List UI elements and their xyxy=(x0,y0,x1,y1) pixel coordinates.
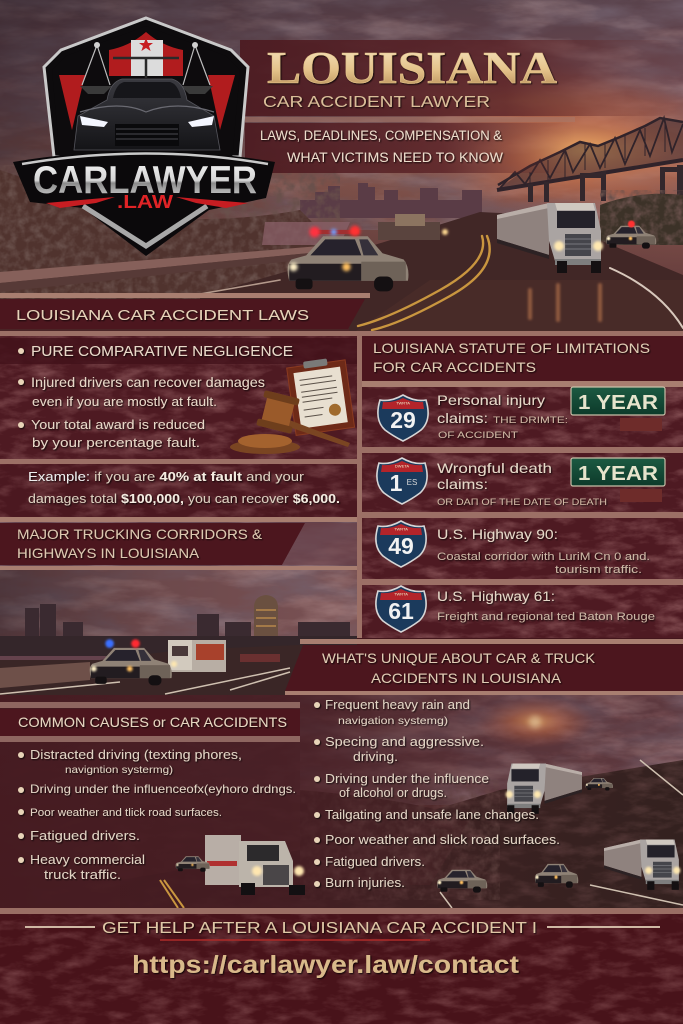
ambulance xyxy=(205,835,305,895)
section header: common causes: COMMON CAUSES or CAR ACCIDENTS xyxy=(18,714,287,730)
list: causes, right column: Poor weather and slick road surfaces. xyxy=(325,833,560,847)
list: causes, right column: Fatigued drivers. xyxy=(325,855,425,869)
tagline: LAWS, DEADLINES, COMPENSATION & xyxy=(260,128,502,143)
row: personal injury: Personal injury xyxy=(437,392,545,408)
row: highway 61: 61 xyxy=(388,598,414,624)
list: causes, right column: navigation systemg) xyxy=(338,715,448,727)
row: personal injury: THE DRIMTE: xyxy=(493,415,568,425)
scene: Baton Rouge skyline with police car xyxy=(0,517,357,695)
logo banner xyxy=(13,151,275,256)
icon: gavel xyxy=(230,390,350,454)
section header: what's unique xyxy=(285,639,683,695)
row: wrongful death: 1 xyxy=(390,470,403,496)
row: highway 61: U.S. Highway 61: xyxy=(437,589,555,604)
section header: Louisiana car accident laws xyxy=(0,293,683,336)
list: causes, right column: Frequent heavy rain and xyxy=(325,698,470,712)
bullet: award reduced: by your percentage fault. xyxy=(32,435,200,450)
row: wrongful death: ES xyxy=(407,478,417,487)
row: personal injury: OF ACCIDENT xyxy=(438,430,519,440)
icon: car front xyxy=(74,79,220,150)
road xyxy=(200,212,683,335)
panel: example calculation: damages total $100,000, you can recover $6,000. xyxy=(28,492,340,506)
subheading: CAR ACCIDENT LAWYER xyxy=(263,94,490,111)
column divider xyxy=(357,336,362,638)
list: causes, right column: driving. xyxy=(353,750,398,764)
section header: major trucking corridors: MAJOR TRUCKING CORRIDORS & xyxy=(17,526,263,542)
hero scene: highway, bridge and police car at sunset xyxy=(0,0,683,335)
bridge xyxy=(497,118,683,190)
distant traffic xyxy=(378,214,448,240)
list: causes, right column xyxy=(314,698,560,890)
bullet: award reduced: Your total award is reduced xyxy=(31,418,205,432)
list: causes, right column: Burn injuries. xyxy=(325,876,405,890)
sign: 1 year: 1 YEAR xyxy=(578,463,659,485)
panel: example calculation xyxy=(0,459,357,517)
list: causes, left column: Driving under the influenceofx(eyhoro drdngs. xyxy=(30,782,296,796)
row: highway 90 xyxy=(376,521,650,576)
panel: statute of limitations header: FOR CAR ACCIDENTS xyxy=(373,359,536,375)
link: contact url: https://carlawyer.law/contact xyxy=(132,951,520,979)
list: causes, left column: Fatigued drivers. xyxy=(30,829,140,843)
guardrail xyxy=(0,246,320,283)
section header: major trucking corridors xyxy=(0,517,357,570)
logo: CarLawyer.law shield: CARLAWYER xyxy=(33,159,257,202)
panel: highways and deadlines xyxy=(362,387,683,638)
row: wrongful death: OR DAΠ OF THE DATE OF DEATH xyxy=(437,497,607,507)
list: causes, right column: of alcohol or drugs. xyxy=(339,786,447,800)
section header: common causes xyxy=(0,702,300,742)
panel: comparative negligence xyxy=(0,336,357,459)
semi truck xyxy=(497,203,603,273)
bullet: award reduced xyxy=(18,418,205,450)
list: causes, left column: Poor weather and tlick road surfaces. xyxy=(30,807,222,819)
police car xyxy=(90,639,172,685)
list: causes, right column: Tailgating and unsafe lane changes. xyxy=(325,808,539,822)
list: causes, right column: Specing and aggressive. xyxy=(325,735,484,749)
row: highway 90: 49 xyxy=(388,533,414,559)
list: causes, left column: Distracted driving (texting phores, xyxy=(30,748,242,762)
section header: major trucking corridors: HIGHWAYS IN LOUISIANA xyxy=(17,545,200,561)
row: wrongful death: DWETA xyxy=(395,464,409,468)
row: personal injury: claims: xyxy=(437,410,488,426)
panel: statute of limitations header xyxy=(362,336,683,387)
row: highway 90: tourism traffic. xyxy=(555,564,642,576)
list: causes, right column: Driving under the influence xyxy=(325,772,489,786)
row: personal injury: TWRTA xyxy=(396,400,410,406)
bullet: recover damages: even if you are mostly at fault. xyxy=(32,395,217,409)
police car xyxy=(288,226,408,291)
ambulance xyxy=(168,640,226,672)
skyline xyxy=(300,183,482,218)
small police suv xyxy=(606,220,656,249)
row: highway 61: TWRTA xyxy=(394,592,408,596)
heading: pure comparative negligence: PURE COMPARATIVE NEGLIGENCE xyxy=(31,344,293,360)
panel: example calculation: Example: if you are 40% at fault and your xyxy=(28,469,305,484)
logo: CarLawyer.law shield: .LAW xyxy=(117,192,173,212)
section header: what's unique: WHAT'S UNIQUE ABOUT CAR & TRUCK xyxy=(322,650,596,666)
row: personal injury xyxy=(378,387,665,441)
scene: lower highway with trucks and ambulance xyxy=(0,695,683,908)
title band xyxy=(240,40,683,173)
list: causes, left column: truck traffic. xyxy=(44,868,121,882)
row: highway 90: U.S. Highway 90: xyxy=(437,527,558,542)
title band: WHAT VICTIMS NEED TO KNOW xyxy=(287,150,503,165)
list: causes, left column: navigntion systermg) xyxy=(65,764,173,776)
bullet: recover damages xyxy=(18,374,265,409)
icon: clipboard xyxy=(286,356,355,435)
row: personal injury: 29 xyxy=(390,407,416,433)
sign: 1 year xyxy=(571,387,665,431)
list: causes, left column: Heavy commercial xyxy=(30,853,145,867)
row: highway 90: Coastal corridor with LuriM Cn 0 and. xyxy=(437,551,650,563)
sign: 1 year xyxy=(571,458,665,502)
list: causes, left column xyxy=(18,748,296,882)
sign: 1 year: 1 YEAR xyxy=(578,392,659,414)
section header: Louisiana car accident laws: LOUISIANA CAR ACCIDENT LAWS xyxy=(16,307,309,324)
tree lines xyxy=(600,194,683,245)
section header: what's unique: ACCIDENTS IN LOUISIANA xyxy=(371,670,562,686)
heading: get help: GET HELP AFTER A LOUISIANA CAR ACCIDENT I xyxy=(102,920,537,937)
logo: CarLawyer.law shield xyxy=(13,18,275,256)
river xyxy=(262,222,350,245)
panel: statute of limitations header: LOUISIANA STATUTE OF LIMITATIONS xyxy=(373,340,650,356)
heading: Louisiana: LOUISIANA xyxy=(267,42,557,93)
truck, mid xyxy=(506,763,582,814)
row: highway 61: Freight and regional ted Baton Rouge xyxy=(437,611,655,623)
cars xyxy=(437,870,487,893)
bullet: recover damages: Injured drivers can recover damages xyxy=(31,374,265,390)
row: highway 61 xyxy=(376,586,655,632)
road lines xyxy=(200,236,683,330)
row: wrongful death xyxy=(377,458,665,507)
row: wrongful death: Wrongful death xyxy=(437,460,552,476)
row: wrongful death: claims: xyxy=(437,476,488,492)
footer: call to action xyxy=(0,908,683,1024)
truck, right xyxy=(604,839,680,890)
row: highway 90: TWRTA xyxy=(394,526,408,532)
